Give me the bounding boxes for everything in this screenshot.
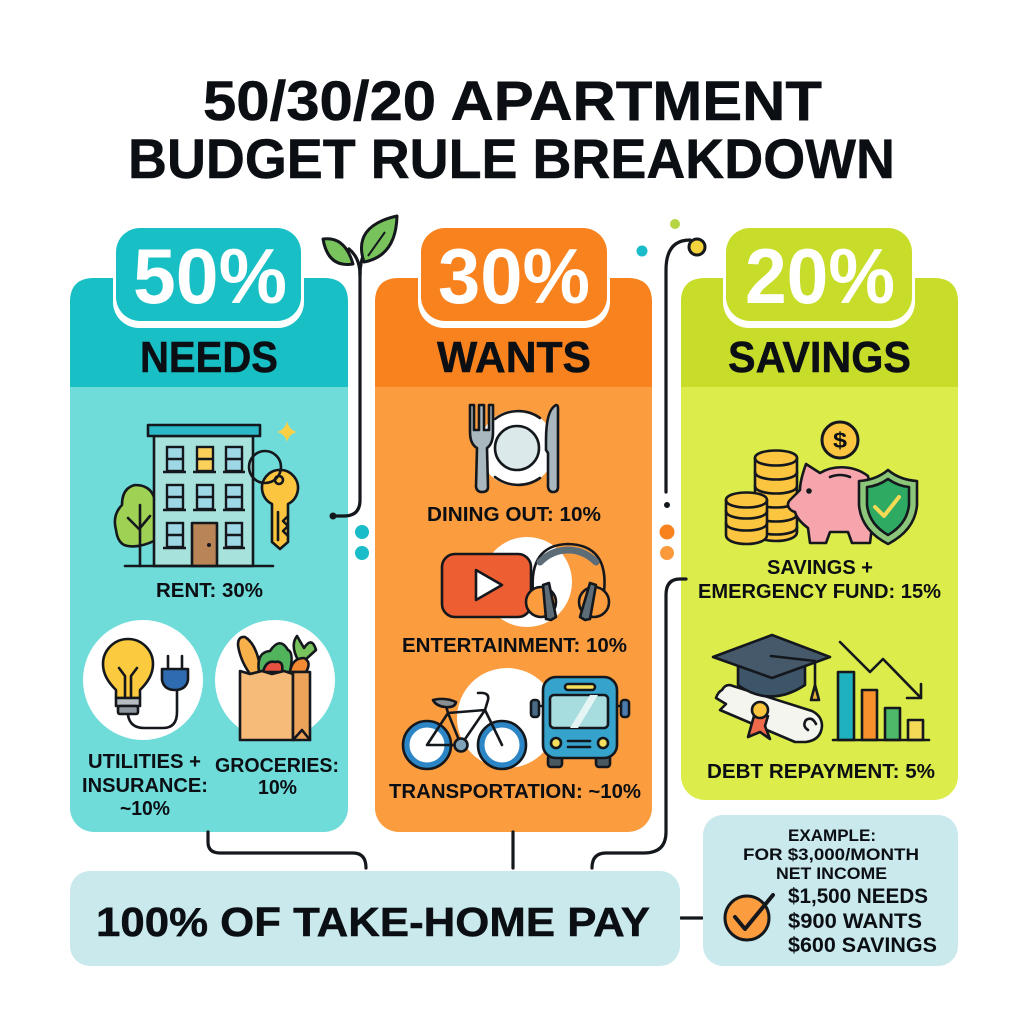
icon: graduation cap and diploma [713, 635, 830, 742]
needs percent badge: 50% [133, 232, 287, 320]
wants panel header [375, 278, 652, 387]
groceries label: 10% [258, 776, 297, 799]
transportation label: TRANSPORTATION: ~10% [389, 780, 641, 803]
icon: grocery bag [215, 620, 335, 740]
total bar [70, 871, 680, 966]
callout: example: NET INCOME [776, 864, 887, 883]
title: 50/30/20 APARTMENT [203, 69, 822, 132]
savings heading: SAVINGS [728, 333, 911, 382]
panel: needs [70, 226, 348, 832]
debt repayment label: DEBT REPAYMENT: 5% [707, 760, 935, 783]
dining out label: DINING OUT: 10% [427, 503, 601, 526]
needs panel background [70, 278, 348, 832]
callout: example: FOR $3,000/MONTH [743, 845, 919, 864]
utilities label [82, 750, 208, 820]
entertainment label: ENTERTAINMENT: 10% [402, 634, 627, 657]
utilities label: UTILITIES + [88, 750, 201, 773]
wants panel background [375, 278, 652, 832]
savings and emergency fund label: EMERGENCY FUND: 15% [698, 580, 941, 603]
needs panel header [70, 278, 348, 387]
icon: check mark [725, 895, 773, 940]
utilities label: ~10% [120, 797, 170, 820]
savings panel header [681, 278, 958, 387]
title: BUDGET RULE BREAKDOWN [128, 127, 895, 190]
icon: video play and headphones [442, 537, 609, 627]
groceries label [215, 754, 339, 799]
savings and emergency fund label: SAVINGS + [767, 556, 873, 579]
connector lines and decoration [208, 219, 705, 918]
icon: falling bar chart with arrow [833, 642, 929, 740]
icon: sprout leaves [323, 216, 397, 275]
panel: savings [681, 226, 958, 800]
icon: plate with fork and knife [470, 405, 558, 492]
panel: wants [375, 226, 652, 832]
rent label: RENT: 30% [156, 579, 263, 602]
icon: sparkle [277, 421, 297, 442]
callout: example: $1,500 NEEDS [788, 885, 928, 908]
icon: coins, piggy bank and shield [726, 422, 917, 544]
savings and emergency fund label [698, 556, 941, 603]
icon: coins, piggy bank and shield: $ [833, 428, 847, 453]
total bar: 100% OF TAKE-HOME PAY [96, 899, 650, 945]
callout: example: $900 WANTS [788, 910, 922, 933]
callout: example: EXAMPLE: [788, 826, 876, 845]
groceries label: GROCERIES: [215, 754, 339, 777]
savings percent badge: 20% [745, 232, 895, 320]
callout: example: $600 SAVINGS [788, 934, 937, 957]
utilities label: INSURANCE: [82, 774, 208, 797]
icon: light bulb and plug [83, 620, 203, 740]
wants heading: WANTS [437, 333, 591, 382]
callout: example [703, 815, 958, 966]
icon: apartment building with key [115, 425, 298, 566]
savings panel background [681, 278, 958, 800]
title [128, 69, 895, 190]
wants percent badge: 30% [438, 232, 590, 320]
needs heading: NEEDS [140, 333, 278, 382]
icon: bicycle and bus [403, 668, 629, 769]
